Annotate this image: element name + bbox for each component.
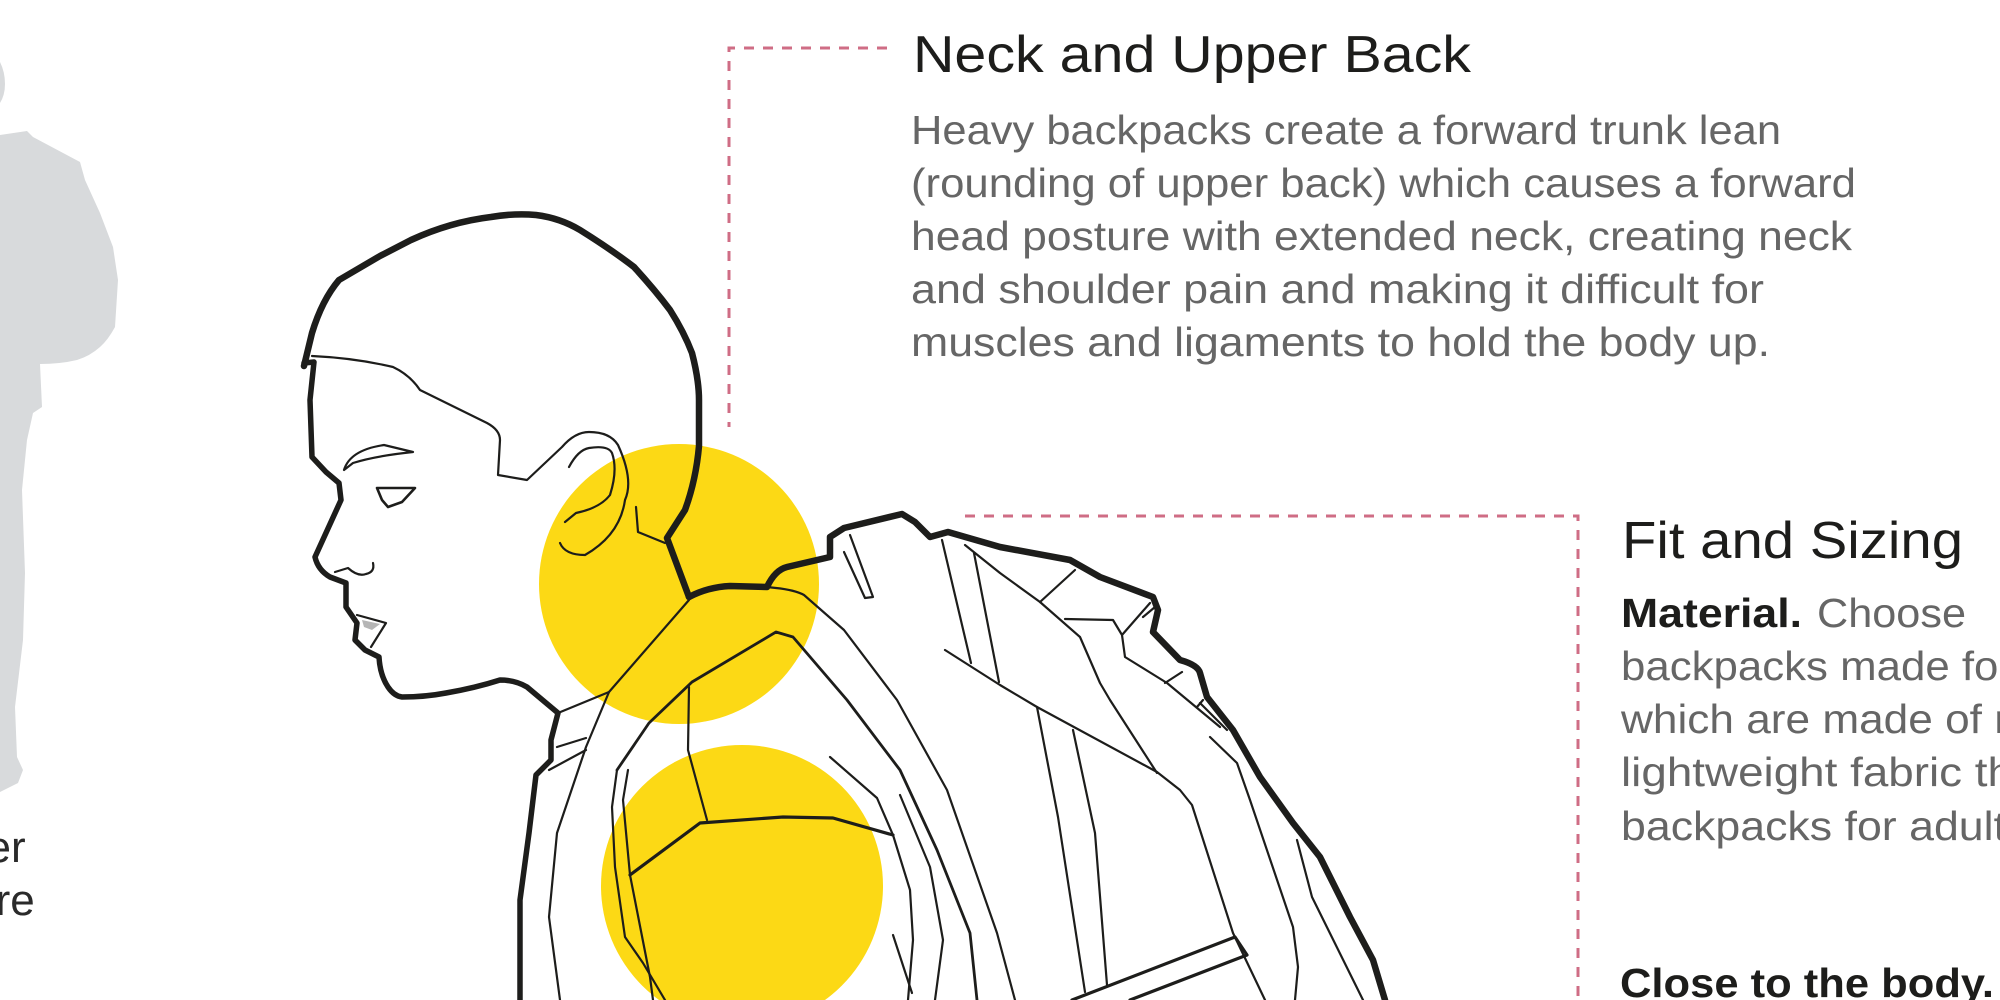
material paragraph: which are made of m xyxy=(1620,696,2000,742)
neck line xyxy=(636,507,665,543)
material paragraph: backpacks for adult xyxy=(1621,803,2000,849)
body text: Heavy backpacks create a forward trunk lean xyxy=(911,107,1781,153)
callout: dashed leader to neck xyxy=(729,48,887,427)
arm strap xyxy=(630,817,893,875)
material paragraph: Material. xyxy=(1621,590,1802,636)
icon: yellow highlight over neck xyxy=(539,444,819,724)
body text: muscles and ligaments to hold the body up. xyxy=(911,319,1770,365)
body text xyxy=(911,107,1856,365)
panel: neck and upper back xyxy=(911,26,1856,365)
text: clipped silhouette caption xyxy=(0,823,35,925)
brow xyxy=(344,445,413,470)
heading: Neck and Upper Back xyxy=(913,26,1472,84)
callout: dashed leader to fit and sizing xyxy=(965,516,1578,1000)
illustration: shoulder and backpack xyxy=(549,514,1385,1000)
backpack outer outline xyxy=(689,514,1385,1000)
lower straps xyxy=(1072,937,1247,1000)
hairline and ear xyxy=(312,356,628,555)
head outline xyxy=(304,214,699,597)
inner ear xyxy=(565,447,615,522)
top padding xyxy=(844,535,873,598)
nostril xyxy=(335,563,373,575)
face profile xyxy=(304,362,558,1000)
material paragraph xyxy=(1620,590,2000,849)
main back panel xyxy=(945,650,1265,1000)
panel: fit and sizing xyxy=(1620,512,2000,1000)
body text: head posture with extended neck, creating neck xyxy=(911,213,1853,259)
mouth xyxy=(357,615,386,647)
heading: Fit and Sizing xyxy=(1622,512,1963,570)
collar strap xyxy=(558,600,689,713)
icon: yellow highlight over shoulder xyxy=(601,745,883,1000)
material paragraph: backpacks made for xyxy=(1621,643,2000,689)
body text: (rounding of upper back) which causes a forward xyxy=(911,160,1856,206)
shoulder panel lines xyxy=(767,587,1015,1000)
eye xyxy=(377,488,415,507)
illustration: boy's head in profile xyxy=(304,214,699,1000)
body text: and shoulder pain and making it difficult for xyxy=(911,266,1764,312)
material paragraph: Choose xyxy=(1817,590,1966,636)
icon: grey silhouette of person with backpack xyxy=(0,62,118,792)
material paragraph: lightweight fabric th xyxy=(1621,749,2000,795)
